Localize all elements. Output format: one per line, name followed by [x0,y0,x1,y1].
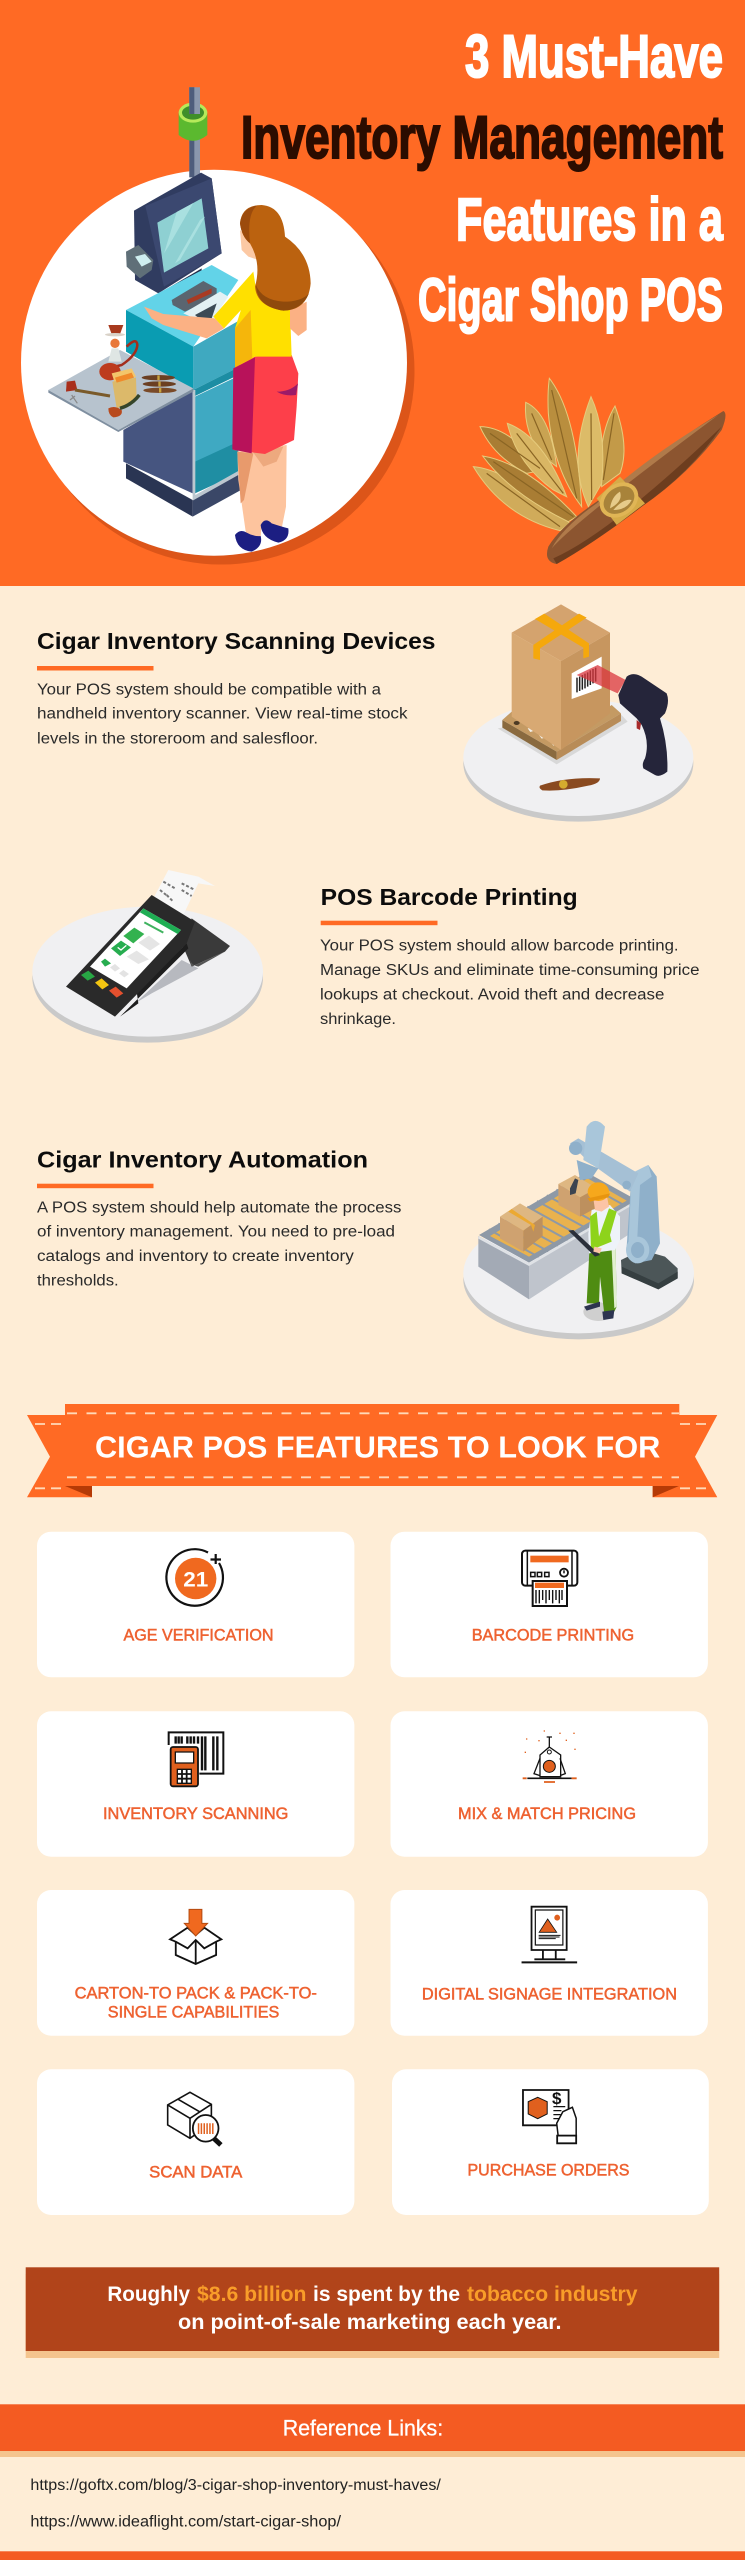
accent bar [37,1184,154,1188]
body text: Manage SKUs and eliminate time-consuming price [320,962,700,979]
label: BARCODE PRINTING [472,1627,634,1645]
robot arm [569,1121,678,1289]
cigar [547,411,725,564]
panel: barcode printing [32,870,700,1043]
card: purchase orders [392,2069,709,2215]
body text [320,938,700,1028]
heading: POS Barcode Printing [321,884,578,910]
body text: handheld inventory scanner. View real-time stock [37,706,408,723]
accent bar [37,666,154,670]
panel: automation [37,1121,694,1339]
label [75,1984,317,2022]
label: PURCHASE ORDERS [468,2162,630,2180]
illustration: conveyor, robot arm and worker [463,1121,694,1339]
icon: barcode printer [522,1551,577,1606]
body text: catalogs and inventory to create inventory [37,1248,354,1265]
body text: shrinkage. [320,1011,396,1028]
illustration: POS kiosk in circle [21,87,414,565]
callout: marketing statistic [26,2267,719,2358]
links: https://www.ideaflight.com/start-cigar-shop/ [30,2513,342,2530]
accent bar [321,921,438,925]
callout: marketing statistic: Roughly [107,2283,190,2306]
worker [568,1182,620,1321]
illustration: box and barcode scanner [463,604,693,822]
label: MIX & MATCH PRICING [458,1805,636,1823]
kiosk [123,87,265,517]
callout: marketing statistic: tobacco industry [467,2283,638,2306]
body text: of inventory management. You need to pre-load [37,1224,395,1241]
links: https://goftx.com/blog/3-cigar-shop-inventory-must-haves/ [30,2477,442,2494]
callout: marketing statistic: $8.6 billion [197,2283,306,2306]
card: carton to pack [37,1890,354,2036]
links [30,2477,442,2530]
banner: features heading [27,1404,717,1497]
illustration: POS terminal with receipt [32,870,263,1043]
body text: thresholds. [37,1273,119,1290]
body text [37,1199,402,1290]
title [241,23,723,334]
icon: handheld scanner [169,1732,223,1786]
panel: header [0,0,745,586]
card: digital signage [390,1890,708,2036]
panel: scanning devices [37,604,693,822]
woman [144,205,311,552]
body text: lookups at checkout. Avoid theft and decrease [320,986,664,1003]
panel: reference links [0,2404,745,2560]
icon: price tag [523,1730,577,1782]
icon: 21+ badge [166,1549,223,1606]
label: AGE VERIFICATION [124,1627,274,1645]
heading: Cigar Inventory Scanning Devices [37,628,436,654]
card: scan data [37,2069,354,2215]
card: barcode printing [390,1532,708,1677]
label: SCAN DATA [149,2164,242,2182]
icon: box and magnifier [168,2092,221,2145]
callout: marketing statistic: on point-of-sale marketing each year. [178,2311,562,2334]
label: CARTON-TO PACK & PACK-TO- [75,1984,317,2002]
reference heading: Reference Links: [283,2416,443,2441]
card: mix and match pricing [390,1711,708,1857]
body text: levels in the storeroom and salesfloor. [37,730,318,747]
boxes [500,1175,598,1252]
leaves [473,378,624,531]
body text: Your POS system should be compatible with a [37,681,381,698]
icon: 21+ badge: 21 [183,1569,209,1592]
card: inventory scanning [37,1711,354,1857]
heading: Cigar Inventory Automation [37,1146,368,1172]
card: age verification [37,1532,354,1677]
label: DIGITAL SIGNAGE INTEGRATION [422,1985,677,2003]
illustration: tobacco leaves and cigar [473,378,725,564]
label: INVENTORY SCANNING [103,1805,288,1823]
icon: order document in hand: $ [552,2089,562,2108]
icon: signage display [522,1907,577,1962]
tray items [66,325,177,417]
body text [37,681,408,747]
label: SINGLE CAPABILITIES [108,2004,279,2022]
icon: order document in hand [523,2089,576,2143]
icon: box with arrow [170,1909,221,1964]
callout: marketing statistic: is spent by the [313,2283,460,2306]
body text: A POS system should help automate the process [37,1199,402,1216]
banner title: CIGAR POS FEATURES TO LOOK FOR [95,1429,660,1464]
body text: Your POS system should allow barcode printing. [320,938,679,955]
